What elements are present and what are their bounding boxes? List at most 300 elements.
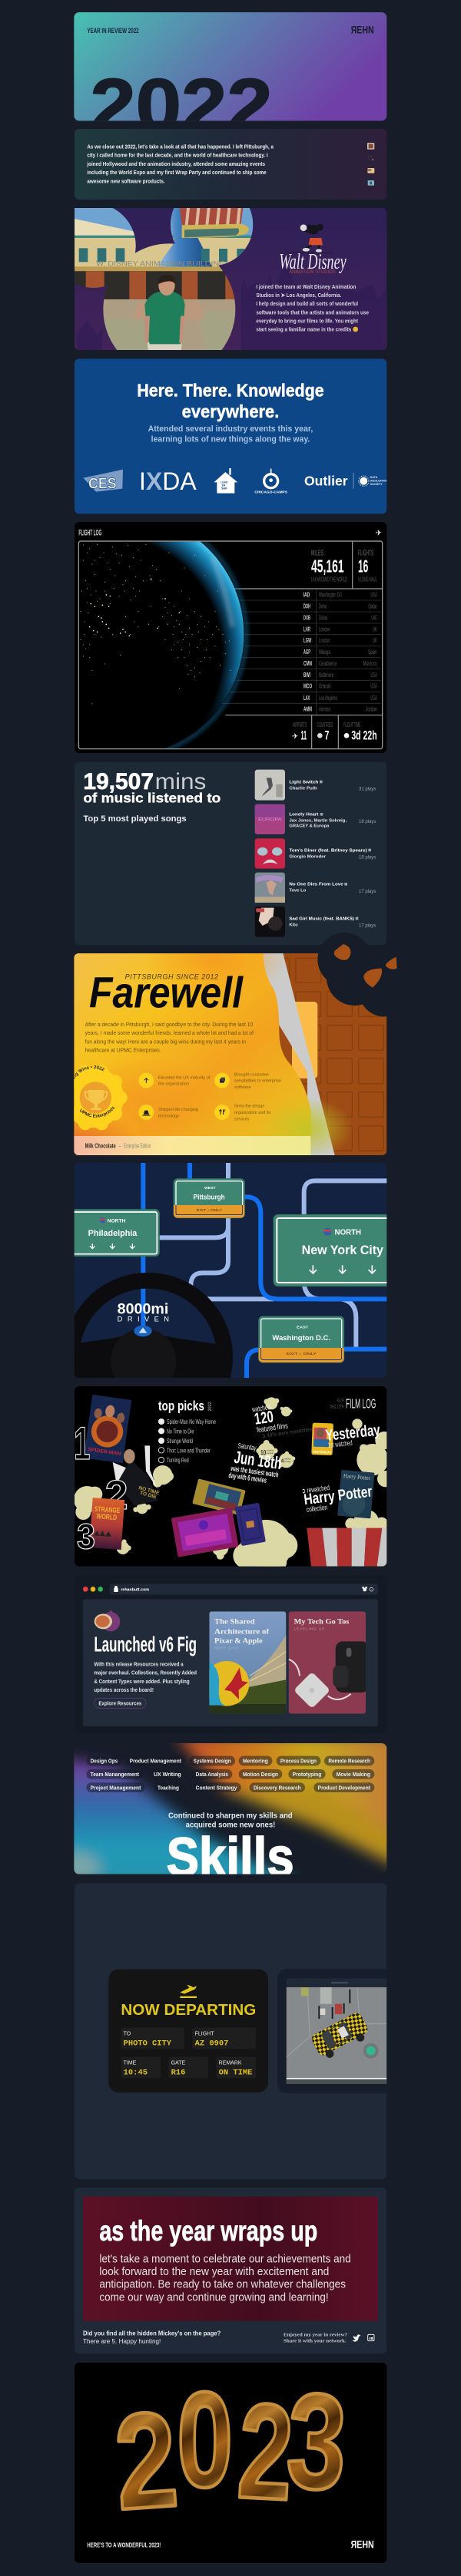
panel: as the year wraps up (75, 2188, 386, 2354)
globe: earth at night (80, 542, 250, 748)
numeral: 1: 1 (74, 1418, 90, 1469)
field: to: TO (124, 2031, 131, 2036)
text block: disney description: I joined the team at Walt Disney Animation (256, 283, 357, 290)
table: airports list: Washington DC (319, 591, 342, 599)
text block: disney description: software tools that the artists and animators use (256, 309, 369, 315)
logo: data visualization society: DATA (370, 476, 378, 479)
song: no one dies from love: 17 plays (359, 890, 376, 894)
sign: pittsburgh: Pittsburgh (194, 1193, 225, 1200)
song: light switch: Light Switch (289, 780, 319, 784)
field: to: PHOTO CITY (124, 2039, 171, 2047)
panel: introduction (75, 129, 386, 200)
heading: of music listened to: of music listened to (83, 790, 221, 805)
panel: flight log: USA (370, 682, 377, 690)
text block: message: let's take a moment to celebrate our achievements and (99, 2253, 351, 2265)
note: busiest day jun 18th: Saturday (237, 1442, 257, 1452)
button: explore resources (95, 1698, 146, 1708)
panel: skills: Motion Design (243, 1771, 278, 1778)
table: airports list: CMN (303, 659, 312, 667)
heading: now departing: NOW DEPARTING (121, 2001, 256, 2019)
stat: averages: weekly (284, 1458, 291, 1461)
table: airports list: AMM (303, 705, 312, 713)
heading: top picks: 2022 (208, 1402, 213, 1411)
table: airports list: Morocco (363, 659, 377, 667)
win: grew design organization (214, 1105, 270, 1121)
song: no one dies from love: Tove Lo (289, 889, 307, 893)
note: busiest day jun 18th: day with 6 movies (228, 1471, 267, 1485)
title: launched v6 fig: Launched v6 Fig (94, 1632, 197, 1656)
text block: intro paragraph: As we close out 2022, let's take a look at all that has happened. I left Pittsburgh, a (87, 143, 274, 150)
text block: farewell paragraph: After a decade in Pittsburgh, I said goodbye to the city. During the last 10 (85, 1021, 253, 1028)
win: grew design organization: organization and its (234, 1111, 270, 1115)
stat: 19507 mins (83, 769, 206, 794)
song: sad girl music: Sad Girl Music (feat. BANKS) (289, 916, 354, 921)
stat: averages: monthly (267, 1449, 274, 1452)
poster: yesterday (311, 1423, 333, 1455)
table: airports list: IAD (303, 591, 310, 599)
note: rewatched harry potter: collection (306, 1504, 328, 1514)
card: shared architecture: The Shared (214, 1618, 255, 1627)
table: airports list: Orlando (319, 682, 331, 690)
field: flight: AZ 0907 (195, 2039, 228, 2047)
poster: no time to die: TO DIE (139, 1491, 158, 1500)
stat: 19507 mins: mins (155, 769, 206, 794)
subheading: attended events: Attended several industry events this year, (148, 424, 313, 434)
stat: averages: average (267, 1451, 274, 1455)
logo: rehn: ЯEHN (351, 2538, 374, 2550)
field: flight: FLIGHT (195, 2031, 214, 2036)
logo: chicago camps: CHICAGO-CAMPS (254, 490, 288, 495)
sign: pittsburgh (174, 1179, 244, 1218)
title: 2022: 2022 (90, 64, 273, 147)
icon: linkedin (368, 2334, 374, 2341)
text block: release notes: With this release Resources received a (94, 1661, 184, 1668)
skill tags (86, 1756, 374, 1792)
stat: averages: average (284, 1460, 291, 1463)
win: grew design organization: Grew the design (234, 1105, 264, 1109)
logo: walt disney: Walt Disney (279, 250, 347, 274)
icon: departing plane (180, 1985, 197, 1998)
card: my tech go tos (289, 1611, 369, 1714)
panel: flight log: UAE (371, 613, 377, 621)
song: sad girl music: 17 plays (359, 924, 376, 929)
photo: mickey shaped studio photo (71, 206, 256, 352)
table: airports list: Casablanca (319, 659, 337, 667)
song: light switch: Charlie Puth (289, 787, 317, 791)
panel: year in review header (74, 12, 387, 121)
field: time: TIME (124, 2060, 137, 2066)
panel: skills: Content Strategy (196, 1784, 237, 1791)
icons: explicit markers (320, 781, 371, 920)
steering wheel (74, 1273, 233, 1378)
sign: philadelphia (69, 1210, 159, 1257)
text block: message: come our way and continue growing and learning! (99, 2291, 329, 2304)
ticket: purple (235, 1503, 266, 1546)
logo: ixda: IXDA (139, 467, 197, 495)
logo: outlier: Outlier (304, 474, 348, 489)
panel: industry events (75, 358, 387, 514)
win: grew design organization: services (234, 1117, 249, 1121)
text block: release notes: major overhaul. Collections, Recently Added (94, 1669, 197, 1676)
poster: no time to die (113, 1445, 161, 1506)
poster: strange world: STRANGE (95, 1505, 121, 1514)
panel: flight log: AIRPORTS (293, 722, 307, 728)
panel: flight log: FLIGHT LOG (78, 529, 101, 538)
popcorn bucket (307, 1528, 388, 1567)
frame: data border (78, 541, 383, 749)
panel: flight log: USA (370, 671, 377, 679)
stat: miles: MILES (311, 549, 323, 557)
browser url bar (110, 1584, 378, 1595)
text block: farewell paragraph: healthcare at UPMC Enterprises. (85, 1046, 161, 1053)
stat: watched 120: watched (251, 1403, 271, 1413)
balloons: 2023: 0 (177, 2364, 233, 2515)
stat: averages: 4 (281, 1458, 284, 1465)
card: now departing (108, 1970, 268, 2092)
text block: farewell paragraph (85, 1021, 254, 1053)
text: hidden mickeys: Did you find all the hidden Mickey's on the page? (83, 2330, 221, 2337)
button: explore resources: Explore Resources (98, 1700, 141, 1707)
list: top five films: Turning Red (167, 1456, 189, 1464)
song: toms diner: Giorgio Moroder (289, 854, 327, 859)
card: airport photo (277, 1969, 398, 2093)
sign: philadelphia: NORTH (108, 1218, 126, 1224)
list: top five films: Thor: Love and Thunder (167, 1446, 211, 1454)
sign: washington dc: EAST (297, 1326, 308, 1330)
text block: intro paragraph: awesome new software products. (87, 177, 165, 184)
yellow wrapper card (292, 1002, 317, 1078)
table: airports list: London (319, 625, 330, 632)
song: no one dies from love (255, 873, 376, 903)
text: hidden mickeys (83, 2330, 221, 2345)
panel: skills: Team Manangement (91, 1771, 140, 1778)
table: airports list: London (319, 636, 330, 644)
title: film log: AS OF (337, 1399, 344, 1404)
panel: website launch (75, 1576, 386, 1733)
panel: skills: UX Writing (154, 1771, 181, 1778)
panel: flight log: LAX AROUND THE WORLD (311, 576, 347, 583)
text: continued to sharpen (168, 1811, 293, 1830)
stat: miles (311, 549, 347, 583)
win: ux maturity: Elevated the UX maturity of (158, 1075, 211, 1080)
song: lonely heart: Jax Jones, Martin Solveig, (289, 819, 347, 824)
song: lonely heart: Lonely Heart (289, 813, 318, 817)
panel: flight log: 11 (301, 728, 307, 742)
song: lonely heart (255, 804, 376, 834)
note: busiest day jun 18th: was the busiest watch (230, 1465, 279, 1480)
table: airports list: Qatar (368, 603, 377, 610)
panel: skills: Remote Research (328, 1758, 370, 1765)
icon: airplane: ✈ (376, 529, 382, 537)
panel: flight log: USA (370, 694, 377, 702)
table: airports list: Jordan (366, 705, 377, 713)
text block: message: anticipation. Be ready to take on whatever challenges (99, 2279, 346, 2291)
text block: message (99, 2253, 351, 2304)
stat: watched 120 (252, 1404, 312, 1438)
panel: film log: FILM LOG (346, 1396, 376, 1412)
panel: flight log: USA (370, 591, 377, 599)
badge: big wins: UPMC Enterprises (80, 1107, 114, 1118)
song: toms diner: Tom's Diner (feat. Britney Spears) (289, 848, 367, 853)
win: shipped technology (138, 1105, 198, 1120)
field: gate: GATE (171, 2060, 186, 2066)
label: milk chocolate enterprise edition (85, 1142, 151, 1149)
table: airports list: DOH (303, 603, 310, 610)
wrapper (74, 953, 311, 1155)
person (148, 342, 181, 350)
badge: big wins: 2018 • Big Wins • 2022 (74, 1065, 104, 1079)
silver foil (261, 953, 335, 1155)
heading: here there knowledge everywhere: everywhere. (182, 401, 279, 421)
song: light switch (255, 770, 376, 801)
stat: watched 120: ➲ 49% were rewatches (261, 1425, 313, 1439)
poster: spider-man (84, 1395, 131, 1463)
logo: leadership house: SHIP (221, 487, 228, 490)
subtitle: pittsburgh since 2012: PITTSBURGH SINCE 2012 (125, 973, 218, 981)
content area (83, 1599, 378, 1726)
note: yesterday first watched: Yesterday (324, 1422, 381, 1445)
sign: washington dc: EXIT ↓ ONLY (287, 1352, 317, 1356)
subheading: top 5 songs: Top 5 most played songs (83, 814, 187, 824)
stat: averages (260, 1449, 291, 1463)
card: my tech go tos: My Tech Go Tos (294, 1618, 350, 1627)
text block: disney description (256, 283, 369, 333)
text block: disney description: start seeing a familiar name in the credits (256, 326, 351, 333)
table: airports list: Amman (319, 705, 330, 713)
balloons: 2023: 2 (234, 2375, 297, 2529)
win: ux maturity (138, 1073, 211, 1088)
stat: flight time: FLIGHT TIME (343, 722, 360, 728)
stat: watched 120: featured films (257, 1422, 288, 1435)
balloons: 2023: 2 (110, 2383, 182, 2538)
panel: flight log: UK (373, 636, 377, 644)
song: sad girl music: Kito (289, 923, 298, 927)
note: busiest day jun 18th: Jun 18th (233, 1447, 283, 1473)
footer strip (74, 1136, 310, 1155)
text block: farewell paragraph: years, I made some wonderful friends, learned a whole lot and had a lot of (85, 1029, 254, 1036)
title: farewell: Farewell (89, 969, 244, 1018)
table: airports list: Los Angeles (319, 694, 337, 702)
list: top five films: Spider-Man No Way Home (167, 1418, 216, 1425)
panel: road trip (74, 1163, 387, 1378)
text block: intro paragraph: joined Hollywood and the animation industry, attended some amazing events (87, 160, 265, 167)
title: skills: Skills (167, 1827, 294, 1888)
heading: as the year wraps up: as the year wraps up (99, 2214, 317, 2247)
field: time: 10:45 (124, 2069, 148, 2077)
browser url bar: rehanbutt.com (121, 1587, 149, 1592)
logo: chicago camps (254, 469, 288, 495)
song: toms diner: 18 plays (359, 856, 376, 860)
browser dots (83, 1587, 103, 1592)
field: remark (216, 2057, 256, 2078)
stat: flight time (343, 722, 377, 742)
ticket: magenta (171, 1508, 239, 1557)
icon: wink emoji (353, 327, 358, 332)
song: lonely heart: 18 plays (359, 820, 376, 824)
table: airports list: LGW (303, 636, 312, 644)
table: airports list: Dubai (319, 613, 327, 621)
text: hidden mickeys: There are 5. Happy hunting! (83, 2338, 161, 2345)
popcorn pieces (74, 1397, 393, 1576)
stat: 8000mi driven: 8000mi (118, 1302, 168, 1318)
song: light switch: 31 plays (359, 788, 376, 792)
gradient mesh (48, 1735, 400, 1886)
title: film log (330, 1399, 376, 1408)
icon: navigation arrow (134, 1326, 152, 1336)
text block: intro paragraph: city I called home for the last decade, and the world of healthcare technology. I (87, 152, 268, 159)
logo: ces: CES (88, 475, 117, 493)
field: remark: ON TIME (219, 2069, 252, 2077)
numeral: 2: 2 (105, 1473, 128, 1518)
win: shipped technology: technology (158, 1114, 179, 1118)
logo: rehn: ЯEHN (351, 24, 374, 36)
panel: skills: Teaching (158, 1784, 179, 1791)
panel: skills: Design Ops (91, 1758, 118, 1765)
card: shared architecture: Pixar & Apple (214, 1637, 263, 1646)
icon: fig (95, 1610, 120, 1631)
silhouette: castle and palms (77, 246, 386, 351)
table: airports list: MCO (303, 682, 312, 690)
panel: skills: Process Design (280, 1758, 317, 1765)
panel: skills (48, 1735, 400, 1888)
ticket: gold (192, 1478, 246, 1515)
song: lonely heart: EUROPA (258, 817, 283, 822)
crumbs (334, 944, 397, 988)
panel: skills: Movie Making (337, 1771, 370, 1778)
sign: new york city (274, 1214, 394, 1286)
table: airports list: LHR (303, 625, 310, 632)
panel: skills: Prototyping (293, 1771, 321, 1778)
panel: skills: Systems Design (194, 1758, 231, 1765)
balloons: 2023: 3 (284, 2365, 350, 2518)
field: gate: R16 (171, 2069, 185, 2077)
label: milk chocolate enterprise edition: Enterprise Edition (124, 1142, 151, 1149)
photo: mickey shaped studio photo: W. DISNEY ANIMATION BUILDING (96, 260, 225, 268)
win: shipped technology: Shipped life-changing (158, 1108, 198, 1112)
title: film log: DEC 12TH (330, 1405, 344, 1409)
heading: top picks: top picks (158, 1399, 204, 1414)
text block: release notes: & Content Types were added. Plus styling (94, 1678, 190, 1685)
text block: disney description: everyday to bring our films to life. You might (256, 317, 358, 324)
win: consumer sensibilities: sensibilities to enterprise (234, 1079, 281, 1084)
poster: harry potter: Harry Potter (343, 1472, 371, 1481)
table: airports list: LAX (303, 694, 310, 702)
panel: skills: Project Management (91, 1784, 141, 1791)
sign: pittsburgh: EXIT ↓ ONLY (197, 1208, 223, 1213)
list: top five films: Strange World (167, 1437, 193, 1445)
panel: skills: Discovery Research (254, 1784, 301, 1791)
note: yesterday first watched (325, 1425, 380, 1448)
song: lonely heart: GRACEY & Europa (289, 824, 330, 828)
stat: averages: 10 (260, 1449, 266, 1457)
note: yesterday first watched: 1st watched (327, 1439, 353, 1449)
win: consumer sensibilities: software (234, 1085, 251, 1090)
table: airports list: Malaga (319, 648, 330, 656)
table: airports list: Baltimore (319, 671, 333, 679)
logo: leadership house: ER (222, 484, 226, 487)
roads (143, 1163, 390, 1379)
text: share prompt: Enjoyed my year in review? (284, 2333, 347, 2338)
poster: strange world (89, 1498, 124, 1550)
text: share prompt: Share it with your network. (284, 2339, 347, 2344)
stat: flights: 16 (358, 556, 368, 576)
text block: release notes: updates across the board! (94, 1686, 154, 1693)
icons: section thumbnails (367, 143, 374, 186)
table: airports list: Doha (319, 603, 327, 610)
panel: 2023 closing (75, 2363, 386, 2563)
panel: walt disney animation studios (71, 206, 386, 352)
panel: skills: Data Analysis (196, 1771, 228, 1778)
stat: airports (292, 722, 307, 742)
note: busiest day jun 18th (229, 1443, 281, 1483)
text: continued to sharpen: Continued to sharpen my skills and (168, 1811, 293, 1820)
text: share prompt (284, 2333, 347, 2344)
table: airports list (303, 591, 377, 713)
sign: washington dc (259, 1316, 344, 1362)
panel: skills: Product Management (130, 1758, 182, 1765)
list: top five films: No Time to Die (167, 1427, 194, 1435)
panel: skills: Mentoring (243, 1758, 268, 1765)
poster: spider-man: SPIDER-MAN (88, 1447, 121, 1457)
sign: new york city: NORTH (335, 1229, 361, 1237)
panel: flight log: UK (373, 625, 377, 632)
stat: countries: 7 (324, 728, 329, 742)
icon: twitter (353, 2334, 360, 2342)
text block: disney description: I help design and build all sorts of wonderful (256, 300, 358, 307)
note: rewatched harry potter: ➲ rewatched (301, 1484, 330, 1495)
stat: countries (317, 722, 333, 742)
panel: flight log: COUNTRIES (317, 722, 333, 728)
field: to (121, 2028, 184, 2049)
stat: watched 120: 120 (254, 1407, 274, 1428)
bite marks (317, 933, 410, 1016)
balloons: 2023 (110, 2364, 350, 2538)
heading: year in review 2022: YEAR IN REVIEW 2022 (87, 27, 139, 35)
banner: red message (83, 2197, 378, 2321)
numeral: 3: 3 (77, 1516, 95, 1556)
card: shared architecture (204, 1611, 286, 1714)
song: sad girl music (255, 907, 376, 937)
field: remark: REMARK (219, 2060, 242, 2066)
table: airports list: BWI (303, 671, 310, 679)
table: airports list: Spain (368, 648, 377, 656)
logo: data visualization society: SOCIETY (370, 483, 383, 486)
stat: flights: FLIGHTS (358, 549, 373, 557)
song: no one dies from love: No One Dies From Love (289, 883, 343, 887)
label: milk chocolate enterprise edition: Milk Chocolate (85, 1142, 116, 1149)
sign: pittsburgh: WEST (204, 1186, 216, 1191)
panel: flight log (75, 522, 387, 753)
icon: mickey mouse figure (287, 224, 333, 253)
win: consumer sensibilities (214, 1072, 281, 1090)
card: my tech go tos: LEVELING UP (294, 1627, 324, 1631)
heading: here there knowledge everywhere (137, 381, 324, 421)
field: flight (192, 2028, 256, 2049)
poster: yesterday: YESTERDAY (313, 1450, 332, 1455)
subheading: attended events: learning lots of new things along the way. (151, 434, 310, 444)
text block: intro paragraph: including the World Expo and my first Wrap Party and continued to ship some (87, 169, 267, 176)
caption: here's to a wonderful 2023: HERE'S TO A WONDERFUL 2023! (87, 2541, 161, 2549)
stat: miles: 45,161 (311, 556, 344, 576)
sign: washington dc: Washington D.C. (272, 1334, 330, 1342)
table: airports list: AGP (303, 648, 310, 656)
text block: release notes (94, 1661, 197, 1693)
poster: strange world: WORLD (96, 1512, 118, 1521)
label: milk chocolate enterprise edition: - (119, 1142, 121, 1149)
poster: no time to die: NO TIME (138, 1485, 161, 1496)
logo: leadership house: LEAD (221, 481, 228, 484)
panel: music (75, 762, 386, 945)
